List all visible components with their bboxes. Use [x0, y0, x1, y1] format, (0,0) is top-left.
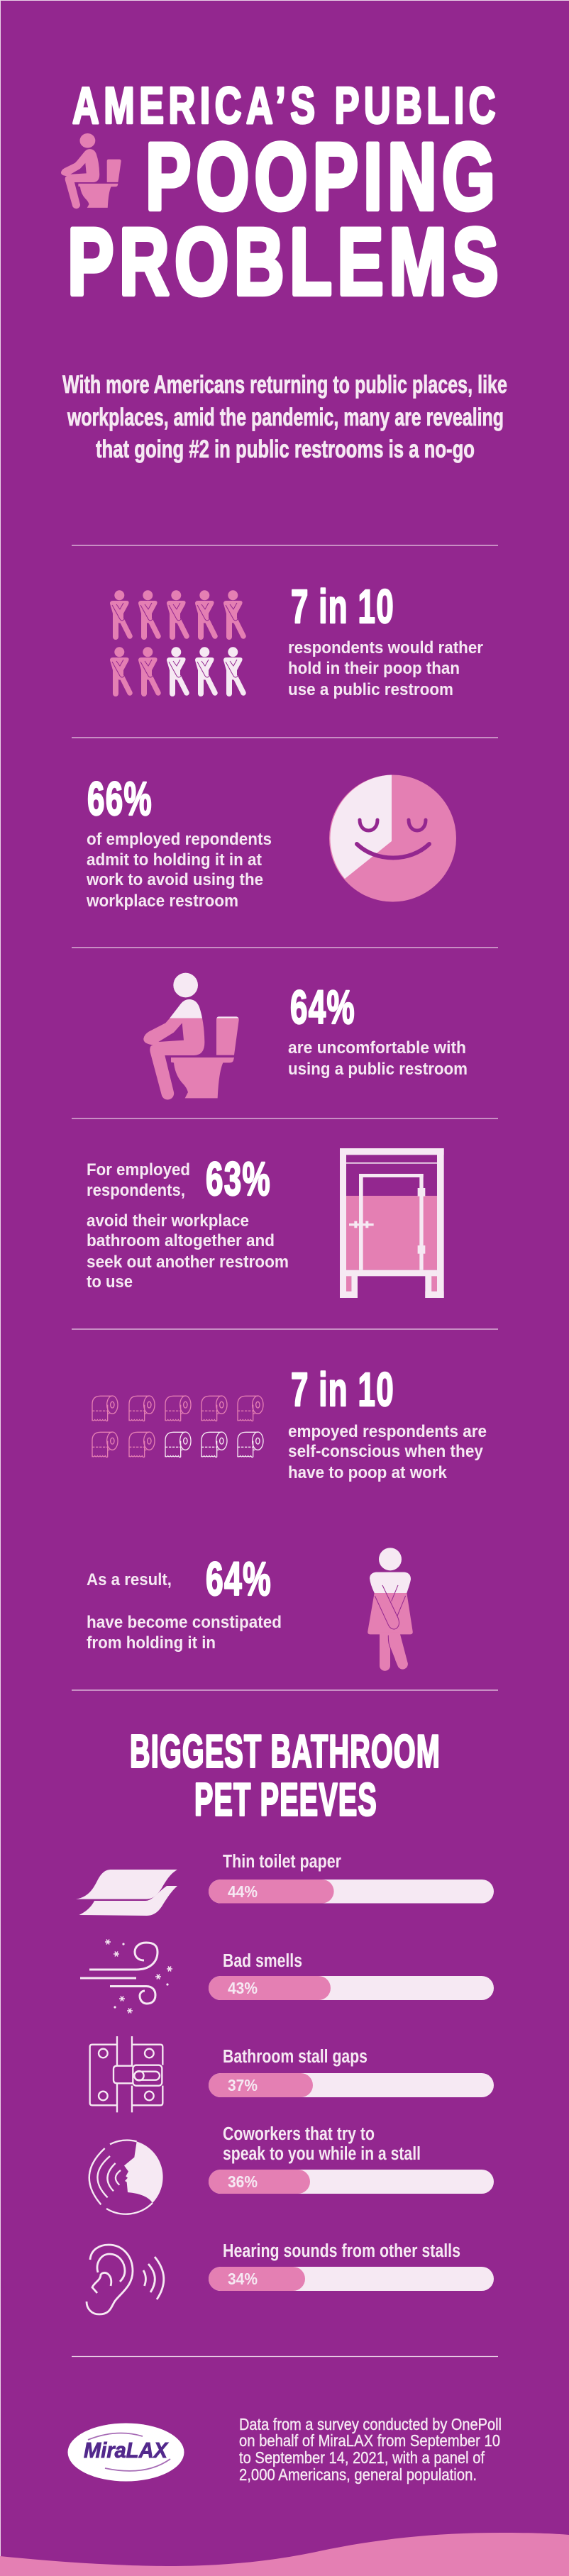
- stat: 63%: 63%: [206, 1153, 271, 1206]
- row: hearing sounds: [87, 2241, 494, 2314]
- stat: 64%: 64%: [290, 981, 355, 1034]
- icon: tissue sheets: [76, 1870, 177, 1916]
- text block: are uncomfortable with: [288, 1038, 466, 1057]
- label: Bathroom stall gaps: [223, 2047, 368, 2067]
- bar: 44%: 44%: [228, 1882, 258, 1901]
- heading: pet peeves: PET PEEVES: [194, 1773, 377, 1826]
- bar: 34%: 34%: [228, 2270, 258, 2288]
- text block: avoid their workplace: [87, 1211, 249, 1231]
- label: Bad smells: [223, 1951, 302, 1971]
- icon: bathroom stall: [340, 1148, 444, 1298]
- bar: 37%: [209, 2073, 494, 2097]
- icon: person on toilet (title): [61, 133, 121, 209]
- text block: seek out another restroom: [87, 1253, 289, 1272]
- text block: hold in their poop than: [288, 659, 460, 678]
- text block: using a public restroom: [288, 1060, 468, 1079]
- source note: [239, 2415, 502, 2484]
- label: Coworkers that try to: [223, 2124, 375, 2144]
- row: coworkers speaking: [89, 2124, 494, 2214]
- icon: smiley pie chart: [329, 775, 456, 902]
- panel: 63%: [87, 1148, 444, 1298]
- text block: [288, 1038, 468, 1079]
- stat: 7 in 10: 7 in 10: [291, 1363, 394, 1416]
- text block: [288, 638, 483, 699]
- label: speak to you while in a stall: [223, 2144, 421, 2164]
- source note: on behalf of MiraLAX from September 10: [239, 2431, 500, 2450]
- text block: of employed repondents: [87, 830, 272, 849]
- panel: 64% constipated: [87, 1548, 413, 1671]
- stat: 7 in 10: 7 in 10: [291, 580, 394, 633]
- logo: MiraLAX: [68, 2423, 184, 2481]
- text block: [87, 1613, 282, 1653]
- bar: 43%: 43%: [228, 1979, 258, 1997]
- bar: 44%: [209, 1880, 494, 1904]
- bar: 37%: 37%: [228, 2076, 258, 2094]
- text block: work to avoid using the: [86, 870, 263, 889]
- bar: 36%: [209, 2170, 494, 2194]
- icon: ear: [87, 2245, 164, 2314]
- text block: workplace restroom: [86, 892, 238, 911]
- text block: use a public restroom: [288, 680, 453, 699]
- heading: pet peeves: [130, 1725, 441, 1826]
- icon grid: ten people holding it: [110, 590, 243, 696]
- icon: speaking head: [89, 2141, 163, 2214]
- label: Thin toilet paper: [223, 1852, 341, 1872]
- text block: bathroom altogether and: [87, 1231, 275, 1250]
- panel: 7 in 10 hold: [110, 580, 483, 699]
- bar: 34%: [209, 2267, 494, 2291]
- icon grid: ten toilet rolls: [92, 1396, 263, 1458]
- icon: stall hinge: [90, 2036, 162, 2112]
- panel: 7 in 10 self-conscious: [92, 1363, 487, 1482]
- stat: 64%: 64%: [206, 1553, 272, 1606]
- text block: [86, 830, 272, 911]
- row: bathroom stall gaps: [90, 2036, 494, 2112]
- logo: MiraLAX: MiraLAX: [84, 2438, 169, 2463]
- text block: self-conscious when they: [288, 1442, 483, 1461]
- text block: have become constipated: [87, 1613, 282, 1632]
- text block: have to poop at work: [288, 1463, 447, 1482]
- bar: 43%: [209, 1976, 494, 2000]
- icon: person on toilet: [143, 973, 239, 1099]
- source note: to September 14, 2021, with a panel of: [239, 2448, 485, 2467]
- text block: admit to holding it in at: [87, 850, 262, 870]
- text block: empoyed respondents are: [288, 1422, 487, 1441]
- source note: Data from a survey conducted by OnePoll: [239, 2415, 502, 2433]
- row: thin toilet paper: [76, 1852, 494, 1916]
- text block: lead-in: [87, 1160, 190, 1200]
- bottom wave: [0, 2533, 569, 2576]
- text block: to use: [87, 1272, 133, 1292]
- stat: 66%: 66%: [87, 772, 153, 826]
- text block: [87, 1211, 289, 1292]
- intro text: [62, 371, 507, 463]
- panel: 64% uncomfortable: [143, 973, 468, 1099]
- text block: respondents would rather: [288, 638, 483, 657]
- icon: wind and odour: [80, 1939, 172, 2013]
- title: [67, 78, 504, 315]
- bar: 36%: 36%: [228, 2172, 258, 2191]
- panel: 66%: [86, 772, 456, 911]
- source note: 2,000 Americans, general population.: [239, 2465, 477, 2484]
- text block: [288, 1422, 487, 1482]
- row: bad smells: [80, 1939, 494, 2013]
- label: Hearing sounds from other stalls: [223, 2241, 460, 2261]
- text block: lead-in: As a result,: [87, 1570, 172, 1589]
- text block: lead-in: respondents,: [87, 1181, 185, 1200]
- icon: woman holding it: [368, 1548, 413, 1671]
- text block: from holding it in: [87, 1633, 216, 1653]
- label: [223, 2124, 421, 2164]
- text block: lead-in: For employed: [87, 1160, 190, 1179]
